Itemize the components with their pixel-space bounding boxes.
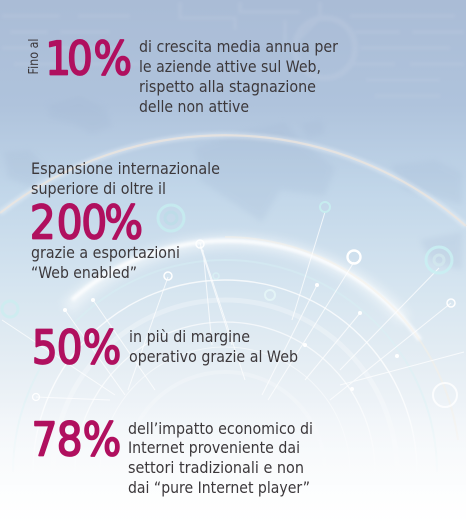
label: Fino al: Fino al (27, 38, 42, 74)
background: light arcs (0, 135, 466, 472)
text: 78 percent description (128, 419, 313, 497)
number: 200%: 200% (30, 197, 143, 250)
text: 78 percent description: dell’impatto economico di (128, 419, 313, 438)
text: 200 percent lead-in (31, 159, 220, 198)
stat: 10 percent (27, 33, 338, 116)
text: 200 percent description: “Web enabled” (31, 263, 137, 282)
text: 78 percent description: dai “pure Internet player” (128, 478, 310, 497)
background: network nodes (2, 202, 457, 407)
stat: 200 percent (30, 159, 220, 282)
number: 78%: 78% (32, 414, 121, 467)
background: circuit pattern (2, 2, 464, 96)
text: 78 percent description: Internet proveniente dai (128, 438, 300, 457)
text: 200 percent lead-in: superiore di oltre il (31, 179, 166, 198)
text: 10 percent description: delle non attive (139, 97, 249, 116)
text: 200 percent description: grazie a esportazioni (31, 243, 180, 262)
text: 10 percent description: le aziende attive sul Web, (139, 57, 321, 76)
text: 200 percent description (31, 243, 180, 282)
background: world map (4, 96, 462, 270)
stat: 78 percent (32, 414, 313, 497)
text: 50 percent description: in più di margine (129, 327, 250, 346)
number: 50%: 50% (32, 322, 121, 375)
text: 50 percent description: operativo grazie al Web (129, 347, 298, 366)
text: 10 percent description: rispetto alla stagnazione (139, 77, 316, 96)
stat: 50 percent (32, 322, 298, 375)
text: 10 percent description: di crescita media annua per (139, 37, 338, 56)
background: lower fade (0, 400, 466, 485)
text: 78 percent description: settori tradizionali e non (128, 458, 304, 477)
text: 50 percent description (129, 327, 298, 366)
number: 10%: 10% (45, 33, 132, 86)
text: 10 percent description (139, 37, 338, 116)
text: 200 percent lead-in: Espansione internazionale (31, 159, 220, 178)
background: network lines (2, 212, 464, 400)
